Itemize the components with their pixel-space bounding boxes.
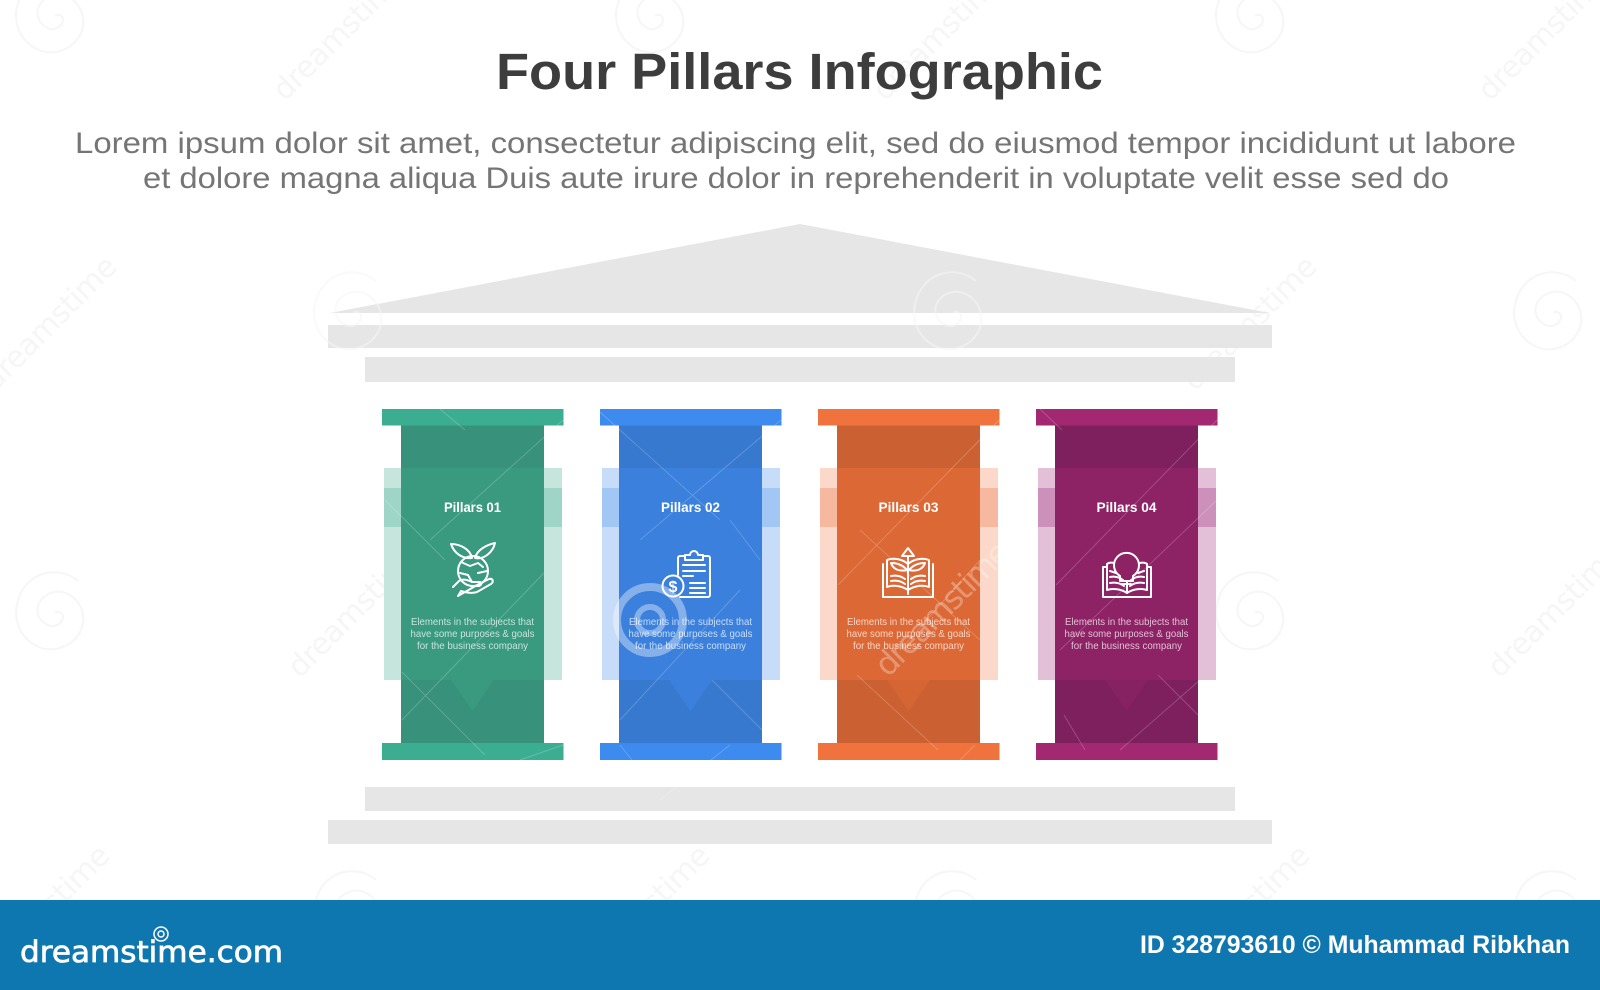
subtitle text: Lorem ipsum dolor sit amet, consectetur adipiscing elit, sed do eiusmod tempor incididunt ut labore xyxy=(75,127,1516,160)
pillar 1 xyxy=(382,409,564,760)
icon: clipboard and coin xyxy=(662,551,710,597)
subtitle text: et dolore magna aliqua Duis aute irure dolor in reprehenderit in voluptate velit esse sed do xyxy=(143,162,1449,195)
watermark pattern: dreamstime xyxy=(1169,838,1317,987)
description xyxy=(1064,616,1188,652)
description: for the business company xyxy=(417,640,529,652)
footer logo: dreamstime.com xyxy=(20,935,283,969)
label: Pillars 01 xyxy=(444,499,501,515)
temple roof xyxy=(328,224,1272,382)
description: for the business company xyxy=(1071,640,1183,652)
description: Elements in the subjects that xyxy=(629,616,752,628)
watermark overlay on pillars xyxy=(314,272,1217,800)
label: Pillars 04 xyxy=(1096,499,1157,515)
description: Elements in the subjects that xyxy=(847,616,970,628)
description: have some purposes & goals xyxy=(410,628,534,640)
description xyxy=(628,616,752,652)
icon: book with light bulb xyxy=(1103,553,1151,597)
watermark pattern: dreamstime xyxy=(281,536,429,685)
title: Four Pillars Infographic xyxy=(496,43,1103,100)
pillar 4 xyxy=(1036,409,1218,760)
footer bar xyxy=(0,900,1600,990)
description: for the business company xyxy=(853,640,965,652)
subtitle text xyxy=(75,127,1516,195)
pillar 2 xyxy=(600,409,782,760)
pillar 3 xyxy=(818,409,1000,760)
description: have some purposes & goals xyxy=(1064,628,1188,640)
footer credit: ID 328793610 © Muhammad Ribkhan xyxy=(1140,931,1570,959)
label: Pillars 03 xyxy=(878,499,939,515)
icon: logo spiral xyxy=(154,927,168,941)
description: have some purposes & goals xyxy=(628,628,752,640)
icon: plant globe in hand xyxy=(451,543,495,596)
watermark pattern: dreamstime xyxy=(1176,249,1324,398)
watermark overlay on pillars: dreamstime xyxy=(867,533,1017,684)
description: Elements in the subjects that xyxy=(411,616,534,628)
label: Pillars 02 xyxy=(661,499,720,515)
description: Elements in the subjects that xyxy=(1065,616,1188,628)
description: have some purposes & goals xyxy=(846,628,970,640)
icon: book with arrow and leaves xyxy=(883,548,933,597)
watermark pattern: dreamstime xyxy=(569,838,717,987)
description: for the business company xyxy=(635,640,747,652)
temple base steps xyxy=(328,787,1272,844)
description xyxy=(846,616,970,652)
description xyxy=(410,616,534,652)
icon: dollar sign: $ xyxy=(669,579,678,596)
pointer notch xyxy=(451,680,494,711)
